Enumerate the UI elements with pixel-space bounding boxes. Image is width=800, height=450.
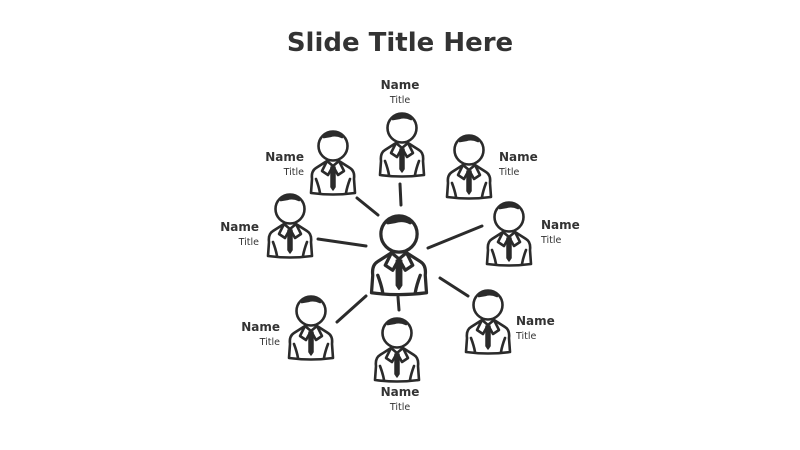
person: lower-left (289, 296, 333, 360)
person: upper-right (447, 136, 491, 198)
labels: Title (259, 337, 280, 348)
person: lower-right (466, 290, 510, 354)
labels: Title (389, 95, 410, 106)
labels: Title (515, 331, 537, 342)
labels: Name (381, 78, 419, 92)
labels: Title (283, 167, 304, 178)
person: center (372, 216, 426, 295)
labels: Title (498, 167, 520, 178)
labels: Name (220, 220, 259, 234)
connector lines (318, 184, 482, 322)
labels: Title (389, 402, 410, 413)
labels: Title (238, 237, 259, 248)
person: left (268, 194, 312, 258)
title: Slide Title Here (287, 28, 513, 58)
labels: Title (540, 235, 562, 246)
person: upper-left (311, 132, 355, 194)
labels (220, 78, 580, 413)
labels: Name (499, 150, 538, 164)
labels: Name (241, 320, 280, 334)
person: bottom (375, 318, 419, 382)
labels: Name (381, 385, 419, 399)
person: right (487, 202, 531, 266)
labels: Name (516, 314, 555, 328)
person: top (380, 114, 424, 176)
labels: Name (265, 150, 304, 164)
labels: Name (541, 218, 580, 232)
